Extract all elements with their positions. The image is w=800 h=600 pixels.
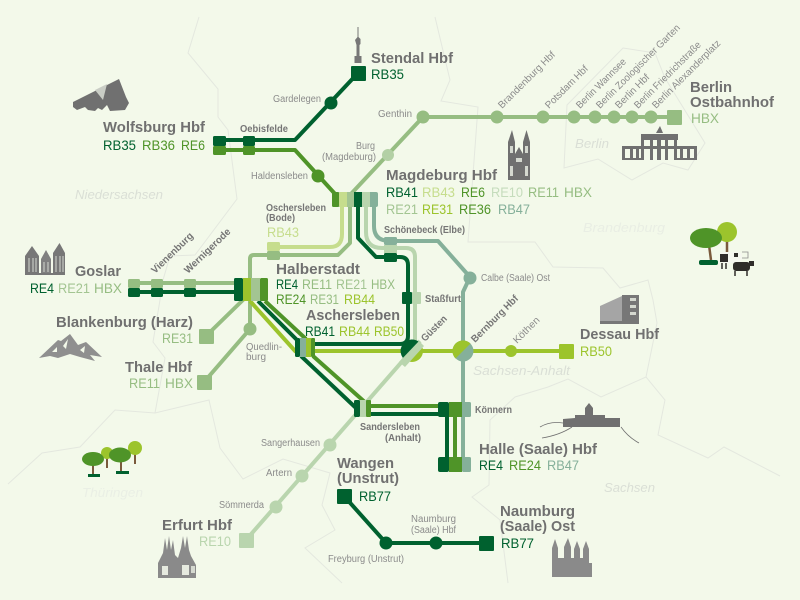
Blankenburg label: RE31 xyxy=(162,330,193,346)
line RE4 Goslar xyxy=(135,290,236,294)
Magdeburg label: RB43 xyxy=(422,184,455,200)
small stop labels: Gardelegen xyxy=(273,94,321,105)
Aschersleben label: RB41 xyxy=(305,323,335,339)
Stassfurt block xyxy=(402,292,421,304)
rotated stop labels: Berlin Zoologischer Garten xyxy=(594,23,683,111)
Schoenebeck block xyxy=(384,237,397,262)
Erfurt label xyxy=(162,517,233,549)
Wangen label xyxy=(337,455,399,504)
icon: Naumburg cathedral xyxy=(552,538,592,577)
rotated stop labels: Bernburg Hbf xyxy=(469,293,521,345)
Halberstadt label: RE4 xyxy=(276,276,298,292)
Thale label xyxy=(125,359,194,391)
Wolfsburg label xyxy=(103,119,206,153)
Aschersleben label: Aschersleben xyxy=(306,307,400,324)
Goslar label: RE21 xyxy=(58,280,90,296)
icon: Stendal statue xyxy=(354,27,362,63)
Stendal label: RB35 xyxy=(371,66,404,82)
small stop labels: Sömmerda xyxy=(219,500,264,511)
Bernburg node xyxy=(452,340,474,362)
line RE10 to Erfurt xyxy=(246,341,420,540)
small stop labels: Artern xyxy=(266,468,292,479)
Oschersleben label: RB43 xyxy=(267,224,299,240)
line RB77 xyxy=(344,496,487,543)
small stop labels: Sangerhausen xyxy=(261,438,320,449)
rotated stop labels: Güsten xyxy=(419,314,450,344)
Wangen label: (Unstrut) xyxy=(337,470,399,487)
small stop labels: Staßfurt xyxy=(425,294,462,305)
Berlin nodes xyxy=(382,110,682,161)
line RB43 xyxy=(272,207,342,247)
line RE21 RE10 xyxy=(366,207,415,351)
Wolfsburg label: RE6 xyxy=(181,137,205,153)
Blankenburg label xyxy=(56,314,193,346)
icon: mountains xyxy=(39,334,102,361)
Halberstadt label: RE21 xyxy=(336,276,367,292)
Erfurt label: RE10 xyxy=(199,533,231,549)
region labels: Sachsen-Anhalt xyxy=(473,363,571,378)
Thale label: RE11 xyxy=(129,375,160,391)
line RB36 RE6 xyxy=(222,150,336,195)
Stendal label: Stendal Hbf xyxy=(371,50,454,67)
Naumburg label xyxy=(500,503,575,551)
Naumburg label: Naumburg xyxy=(500,503,575,520)
small stop labels: Schönebeck (Elbe) xyxy=(384,225,465,236)
Guesten node xyxy=(399,340,424,367)
Halberstadt label: Halberstadt xyxy=(276,261,360,278)
Magdeburg label: HBX xyxy=(564,184,593,200)
region labels: Thüringen xyxy=(82,485,143,500)
small stop labels: Calbe (Saale) Ost xyxy=(481,273,550,284)
Halberstadt label: RB44 xyxy=(344,291,375,307)
Halle label: RE4 xyxy=(479,457,503,473)
icon: Goslar houses xyxy=(25,243,65,275)
Halle block xyxy=(438,457,471,472)
Halberstadt label xyxy=(276,261,396,307)
small stop labels: Naumburg xyxy=(411,514,456,525)
small stop labels: Haldensleben xyxy=(251,171,308,182)
line Sandersleben to Halle xyxy=(368,404,445,408)
Dessau label: RB50 xyxy=(580,343,612,359)
Magdeburg label: RE36 xyxy=(459,201,491,217)
Halle label: RE24 xyxy=(509,457,541,473)
Calbe node xyxy=(464,272,476,284)
Blankenburg Thale Quedlinburg xyxy=(197,322,256,390)
icon: Erfurt cathedral xyxy=(158,536,196,578)
icon: Brandenburg Gate xyxy=(622,126,697,160)
Magdeburg label: RE10 xyxy=(491,184,523,200)
Halberstadt block xyxy=(234,278,268,301)
rotated stop labels: Berlin Wannsee xyxy=(574,56,629,111)
region labels: Sachsen xyxy=(604,480,655,495)
icon: Magdeburg cathedral xyxy=(508,130,530,180)
Wolfsburg label: RB36 xyxy=(142,137,175,153)
Oschersleben label xyxy=(266,203,326,240)
Magdeburg label: RE11 xyxy=(528,184,559,200)
Oschersleben label: Oschersleben xyxy=(266,203,326,214)
rotated stop labels: Berlin Alexanderplatz xyxy=(650,38,723,111)
rotated stop labels: Wernigerode xyxy=(182,226,234,276)
small stop labels: burg xyxy=(246,352,266,363)
line HBX to Berlin xyxy=(350,117,675,195)
icon: Wolfsburg building xyxy=(73,79,129,111)
Halberstadt label: HBX xyxy=(371,276,396,292)
Wolfsburg label: RB35 xyxy=(103,137,136,153)
rail lines xyxy=(135,73,675,543)
rotated stop labels xyxy=(149,23,723,346)
Goslar Vienenburg Wernigerode blocks xyxy=(128,279,196,297)
Stendal label xyxy=(371,50,454,82)
line RE31 Blankenburg xyxy=(206,298,245,336)
Erfurt label: Erfurt Hbf xyxy=(162,517,233,534)
Berlin Ostbahnhof label: Ostbahnhof xyxy=(690,94,775,111)
rotated stop labels: Köthen xyxy=(511,315,542,346)
icon: trees and cows Brandenburg xyxy=(690,222,754,276)
Wangen Naumburg nodes xyxy=(337,489,494,551)
Magdeburg block xyxy=(332,192,378,207)
Koethen and Dessau xyxy=(505,344,574,359)
line RB50 xyxy=(312,349,566,353)
Magdeburg label: RE31 xyxy=(422,201,453,217)
Aschersleben block xyxy=(295,338,315,357)
line RB47 xyxy=(374,207,470,465)
Oschersleben block xyxy=(267,242,280,260)
Dessau label: Dessau Hbf xyxy=(580,326,660,343)
Dessau label xyxy=(580,326,660,359)
Aschersleben label: RB50 xyxy=(374,323,404,339)
Halberstadt label: RE24 xyxy=(276,291,306,307)
Magdeburg label xyxy=(386,167,593,217)
Berlin Ostbahnhof label: Berlin xyxy=(690,79,732,96)
Magdeburg label: Magdeburg Hbf xyxy=(386,167,498,184)
small stop labels: Sandersleben xyxy=(360,422,420,433)
Blankenburg label: Blankenburg (Harz) xyxy=(56,314,193,331)
Halberstadt label: RE31 xyxy=(310,291,339,307)
Goslar label: HBX xyxy=(94,280,123,296)
Goslar label: RE4 xyxy=(30,280,54,296)
region labels: Berlin xyxy=(575,136,609,151)
region labels: Brandenburg xyxy=(583,220,666,235)
Aschersleben label: RB44 xyxy=(339,323,370,339)
icon: Halle castle xyxy=(540,403,639,443)
rotated stop labels: Berlin Friedrichstraße xyxy=(632,39,704,111)
rotated stop labels: Brandenburg Hbf xyxy=(496,49,558,111)
small stop labels: Oebisfelde xyxy=(240,124,288,135)
Oschersleben label: (Bode) xyxy=(266,213,295,224)
rotated stop labels: Potsdam Hbf xyxy=(543,64,591,111)
Berlin Ostbahnhof label: HBX xyxy=(691,110,720,126)
Aschersleben label xyxy=(305,307,404,339)
small stop labels: Quedlin- xyxy=(246,342,282,353)
small stop labels: Burg xyxy=(356,141,375,152)
Magdeburg label: RB47 xyxy=(498,201,530,217)
small stop labels: (Magdeburg) xyxy=(322,152,376,163)
Goslar label: Goslar xyxy=(75,263,121,280)
rotated stop labels: Vienenburg xyxy=(149,231,196,276)
small stop labels: Könnern xyxy=(475,405,512,416)
Naumburg label: RB77 xyxy=(501,535,534,551)
Stendal xyxy=(324,66,366,110)
icon: Dessau building xyxy=(600,295,639,324)
Goslar label xyxy=(30,263,123,296)
Halle label: RB47 xyxy=(547,457,579,473)
small stop labels: (Anhalt) xyxy=(385,433,421,444)
line RB41 xyxy=(312,207,408,344)
region labels xyxy=(75,136,666,500)
Halberstadt label: RE11 xyxy=(302,276,332,292)
Wangen label: RB77 xyxy=(359,488,391,504)
Wangen label: Wangen xyxy=(337,455,394,472)
Halle label: Halle (Saale) Hbf xyxy=(479,441,598,458)
small stop labels: Genthin xyxy=(378,109,412,120)
Magdeburg label: RB41 xyxy=(386,184,418,200)
Wolfsburg and Oebisfelde xyxy=(213,136,324,182)
line HBX to Halberstadt and Thale xyxy=(204,207,350,382)
small stop labels: Freyburg (Unstrut) xyxy=(328,554,404,565)
line Aschersleben to Sandersleben xyxy=(301,356,356,408)
Koennern block xyxy=(438,402,471,417)
line RB35 xyxy=(222,73,358,140)
Thale label: HBX xyxy=(165,375,194,391)
line Halberstadt to Aschersleben xyxy=(258,301,299,342)
small stop labels xyxy=(219,94,550,565)
rotated stop labels: Berlin Hbf xyxy=(613,72,652,111)
Magdeburg label: RE21 xyxy=(386,201,418,217)
Thale label: Thale Hbf xyxy=(125,359,193,376)
small stop labels: (Saale) Hbf xyxy=(411,525,456,536)
Berlin Ostbahnhof label xyxy=(690,79,775,126)
Magdeburg label: RE6 xyxy=(461,184,485,200)
Erfurt nodes xyxy=(239,438,336,548)
region labels: Niedersachsen xyxy=(75,187,163,202)
Naumburg label: (Saale) Ost xyxy=(500,518,575,535)
Wolfsburg label: Wolfsburg Hbf xyxy=(103,119,206,136)
Sandersleben block xyxy=(354,400,371,417)
icon: trees Thuringen xyxy=(82,441,142,477)
Halle label xyxy=(479,441,598,473)
station blocks and nodes xyxy=(128,66,682,551)
